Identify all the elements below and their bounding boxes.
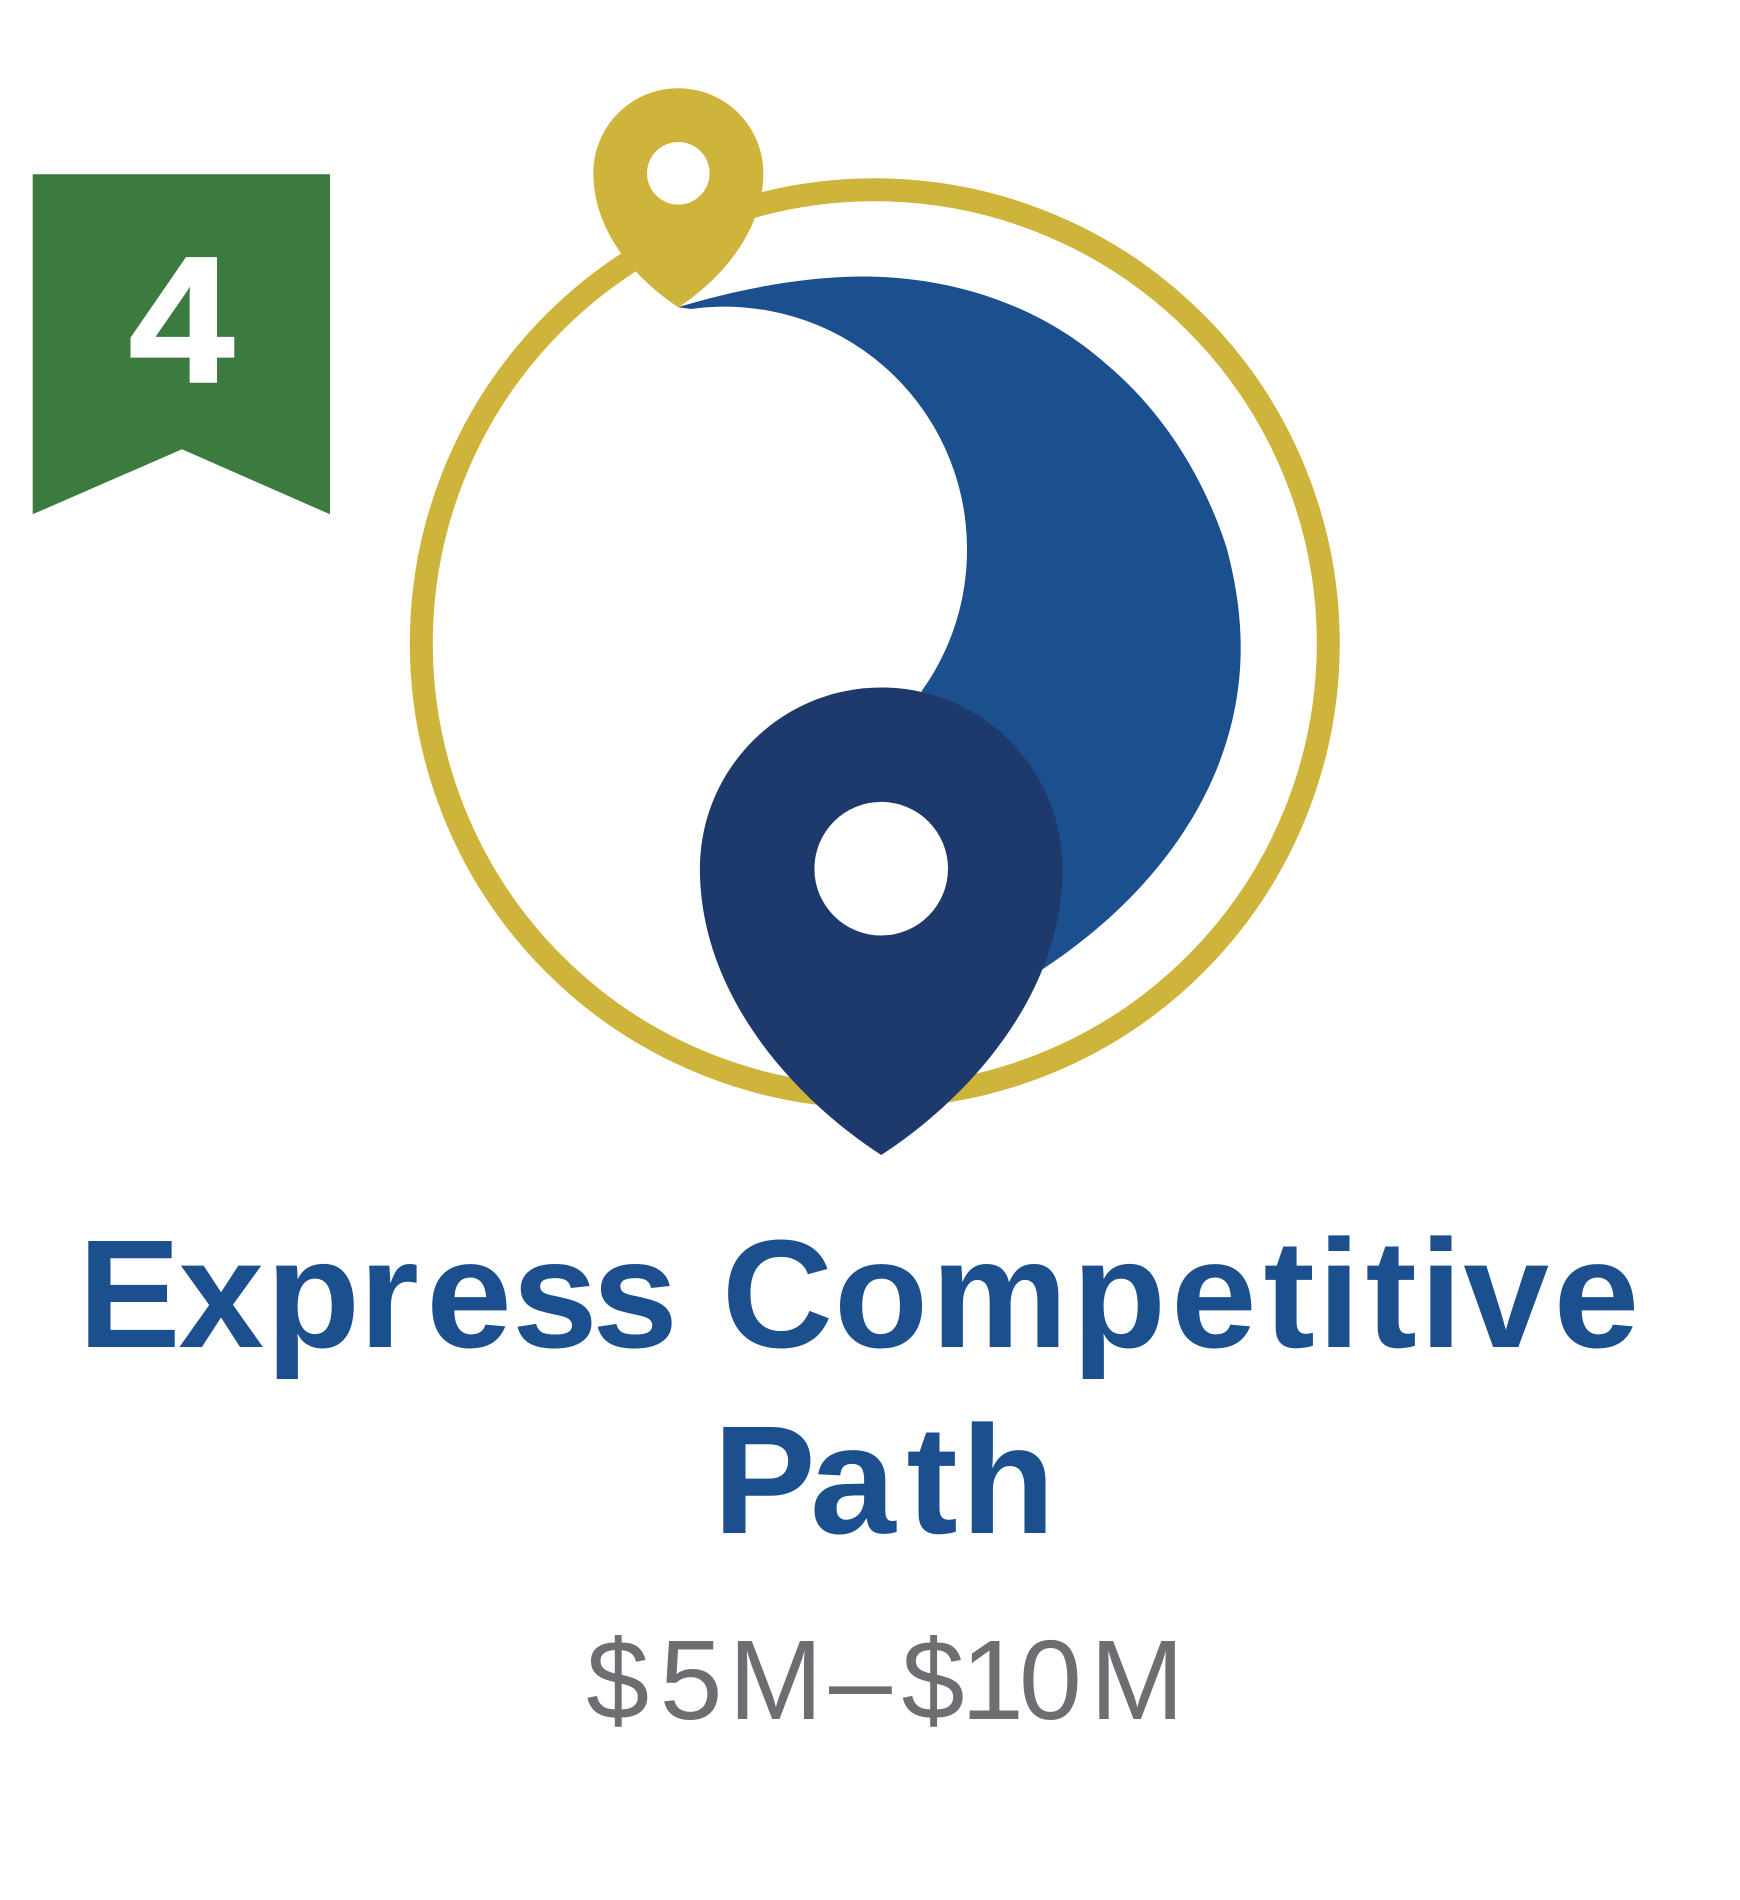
heading: Express Competitive Path [78, 1208, 1639, 1566]
heading: Express Competitive Path: Path [713, 1394, 1055, 1566]
heading: Express Competitive Path: Express Competitive [78, 1208, 1639, 1380]
badge: green ribbon with number 4: 4 [129, 220, 234, 420]
icon: route circle with map pins [421, 88, 1328, 1155]
text: funding range: $5M–$10M [586, 1617, 1184, 1743]
gold ring [421, 190, 1328, 1097]
badge: green ribbon with number 4 [33, 174, 330, 514]
icon: small gold pin [593, 88, 763, 307]
blue crescent route [678, 276, 1241, 969]
icon: large navy pin [700, 688, 1062, 1155]
